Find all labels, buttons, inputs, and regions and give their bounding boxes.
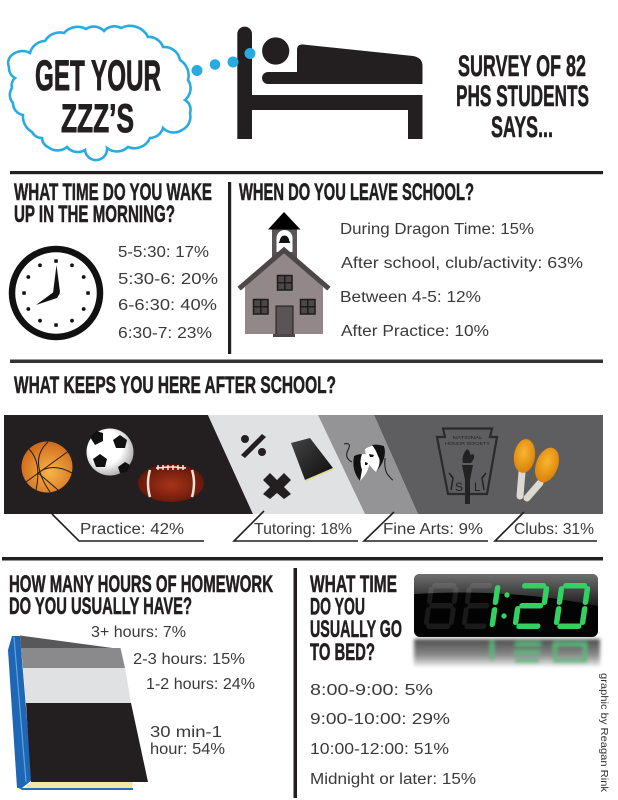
icon: clock xyxy=(12,249,100,337)
bedtime stats: 10:00-12:00: 51% xyxy=(310,741,449,758)
bedtime stats: 9:00-10:00: 29% xyxy=(310,711,450,728)
icon: digital clock reading 1:20 xyxy=(414,574,600,666)
callout: practice xyxy=(52,514,204,541)
icon: football xyxy=(138,464,204,502)
leave school stats xyxy=(340,221,583,340)
callout: tutoring xyxy=(234,511,358,541)
homework stats: 2-3 hours: 15% xyxy=(133,651,245,668)
icon: national honor society emblem: L xyxy=(474,480,481,494)
panel: after school activities xyxy=(4,372,603,541)
icon: theater masks xyxy=(344,444,393,481)
heading: bedtime: WHAT TIME xyxy=(310,571,397,598)
leave school stats: Between 4-5: 12% xyxy=(340,289,481,306)
leave school stats: After school, club/activity: 63% xyxy=(341,255,583,272)
icon: soccer ball xyxy=(86,428,134,476)
leave school stats: After Practice: 10% xyxy=(341,323,489,340)
chart: book stacked by hours xyxy=(8,636,148,790)
heading: wake time: WHAT TIME DO YOU WAKE xyxy=(14,179,212,206)
panel: wake time xyxy=(12,179,218,342)
heading: homework xyxy=(9,571,273,620)
wake time stats: 5-5:30: 17% xyxy=(118,244,209,261)
heading: survey: SAYS... xyxy=(491,111,553,144)
heading: leave school: WHEN DO YOU LEAVE SCHOOL? xyxy=(239,179,474,206)
heading: after school: WHAT KEEPS YOU HERE AFTER SCHOOL? xyxy=(14,372,336,399)
clock reflection xyxy=(414,639,600,666)
homework stats: hour: 54% xyxy=(150,741,225,758)
panel: bedtime xyxy=(310,571,600,788)
icon: book xyxy=(291,438,333,482)
title xyxy=(35,52,161,141)
bedtime stats: 8:00-9:00: 5% xyxy=(310,682,433,699)
title: ZZZ’S xyxy=(61,97,134,141)
title: GET YOUR xyxy=(35,52,161,100)
icon: thought cloud with title xyxy=(8,26,191,160)
heading: homework: HOW MANY HOURS OF HOMEWORK xyxy=(9,571,273,598)
callout: fine arts: Fine Arts: 9% xyxy=(383,521,483,538)
icon: national honor society emblem: HONOR SOCIETY xyxy=(445,441,490,446)
callout: clubs: Clubs: 31% xyxy=(514,521,594,538)
callout: clubs xyxy=(495,512,597,541)
heading: bedtime: DO YOU xyxy=(310,594,365,620)
wake time stats: 6:30-7: 23% xyxy=(118,325,212,342)
homework stats xyxy=(91,624,255,758)
wake time stats: 5:30-6: 20% xyxy=(118,271,218,288)
homework stats: 30 min-1 xyxy=(150,724,222,741)
heading: wake time: UP IN THE MORNING? xyxy=(14,201,175,228)
icon: basketball xyxy=(22,442,72,492)
heading: bedtime: USUALLY GO xyxy=(310,616,402,643)
bedtime stats: Midnight or later: 15% xyxy=(310,771,476,788)
icon: person in bed xyxy=(237,27,422,139)
icon: national honor society emblem xyxy=(437,428,497,504)
icon: national honor society emblem: S xyxy=(455,480,463,494)
bedtime stats xyxy=(310,682,476,788)
heading: wake time xyxy=(14,179,212,228)
icon: math symbols xyxy=(241,434,291,499)
wake time stats xyxy=(118,244,218,342)
heading: survey xyxy=(456,50,589,144)
homework stats: 3+ hours: 7% xyxy=(91,624,186,641)
heading: bedtime: TO BED? xyxy=(310,639,375,666)
icon: thought bubble dots xyxy=(192,48,256,76)
band: activity segments xyxy=(4,415,603,514)
panel: leave school xyxy=(239,179,583,340)
icon: schoolhouse xyxy=(241,212,327,337)
heading: bedtime xyxy=(310,571,402,666)
heading: homework: DO YOU USUALLY HAVE? xyxy=(9,593,192,620)
wake time stats: 6-6:30: 40% xyxy=(118,297,217,314)
callout: practice: Practice: 42% xyxy=(80,521,184,538)
homework stats: 1-2 hours: 24% xyxy=(146,676,255,693)
callout: tutoring: Tutoring: 18% xyxy=(254,521,352,538)
callout: fine arts xyxy=(364,512,488,541)
panel: homework xyxy=(8,571,273,790)
icon: maracas xyxy=(512,438,563,498)
icon: national honor society emblem: NATIONAL xyxy=(452,435,483,440)
leave school stats: During Dragon Time: 15% xyxy=(340,221,534,238)
credit: graphic by Reagan Rink xyxy=(598,673,610,793)
